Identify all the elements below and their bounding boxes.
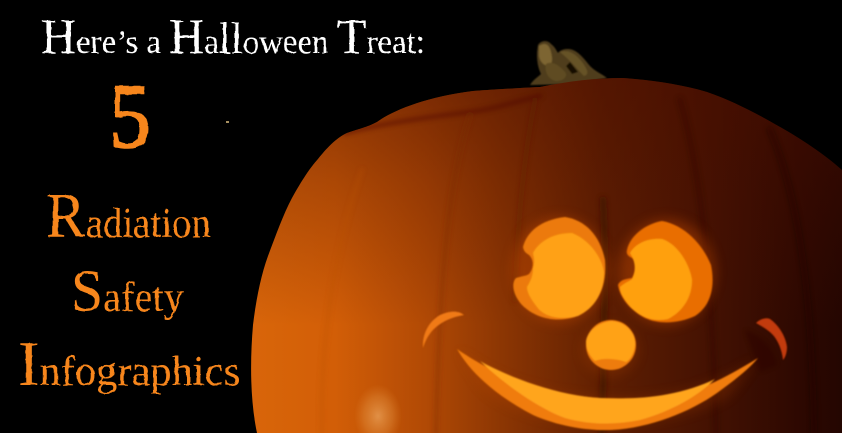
pumpkin left highlight <box>358 389 398 433</box>
title: Here's a Halloween Treat: Here’s a Halloween Treat: <box>41 8 425 64</box>
pumpkin body <box>245 75 842 433</box>
pumpkin base colour <box>245 75 842 433</box>
right dimple <box>756 318 787 360</box>
heading: Safety: Safety <box>71 258 184 324</box>
heading: Infographics: Infographics <box>18 328 240 399</box>
speck <box>226 121 229 123</box>
shadow band under dimples and smile ends <box>745 330 777 372</box>
right eye <box>618 221 713 322</box>
icon: pumpkin stem <box>530 41 607 85</box>
left dimple <box>423 312 464 348</box>
nose <box>586 320 636 370</box>
left eye <box>513 217 605 320</box>
heading: number 5: 5 <box>109 65 151 167</box>
glow around face <box>493 213 750 420</box>
pumpkin top shading <box>258 78 842 296</box>
smile <box>457 349 758 430</box>
jack-o-lantern face <box>423 217 787 430</box>
pumpkin ribs <box>322 96 814 433</box>
heading: Radiation: Radiation <box>46 180 211 251</box>
